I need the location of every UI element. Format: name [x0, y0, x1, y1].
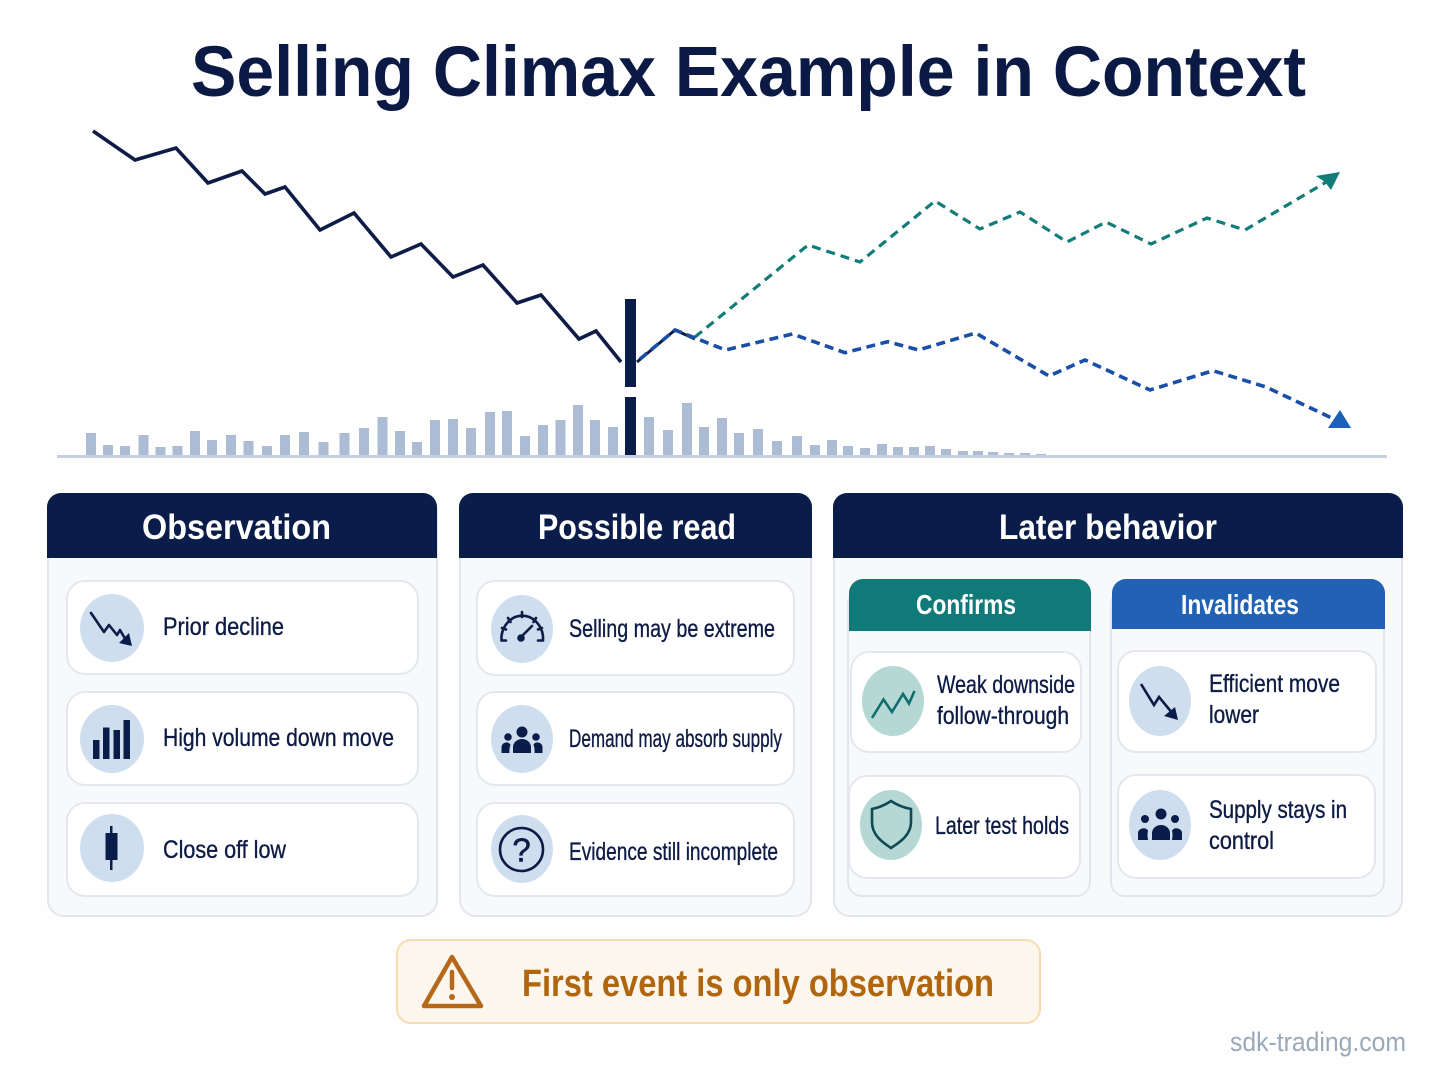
label: [1209, 796, 1347, 855]
panel body: [834, 495, 1402, 916]
heading: Observation: [142, 508, 331, 547]
panel: possible read: [459, 493, 812, 916]
card: high volume: [67, 692, 418, 785]
sub-heading: Invalidates: [1181, 589, 1299, 620]
label: follow-through: [937, 702, 1069, 730]
label: control: [1209, 827, 1274, 855]
volume baseline: [57, 455, 1387, 458]
panel: observation: [47, 493, 437, 916]
label: [1209, 670, 1340, 729]
icon: falling arrow: [1129, 666, 1191, 736]
card: prior decline: [67, 581, 418, 674]
label: Weak downside: [937, 671, 1075, 699]
heading: Later behavior: [999, 508, 1217, 547]
climax price bar: [625, 299, 636, 387]
chart: price and volume: [57, 131, 1387, 458]
confirming teal path: [695, 181, 1328, 337]
panel body: [48, 495, 437, 916]
sub-panel header: [1112, 579, 1385, 629]
label: Efficient move: [1209, 670, 1340, 698]
volume bars: [86, 403, 1046, 456]
label: Demand may absorb supply: [569, 725, 782, 753]
card: efficient move: [1118, 651, 1376, 752]
label: Later test holds: [935, 812, 1069, 840]
icon: gauge: [491, 595, 553, 663]
label: Selling may be extreme: [569, 615, 775, 643]
card: evidence incomplete: [477, 803, 794, 896]
panel: later behavior: [833, 493, 1403, 916]
card: weak downside: [851, 652, 1081, 752]
label: lower: [1209, 701, 1259, 729]
sub-panel body: [1111, 590, 1384, 896]
watermark: sdk-trading.com: [1230, 1027, 1406, 1057]
label: [937, 671, 1075, 730]
sub-panel header: [849, 579, 1091, 631]
card: demand absorbs: [477, 692, 794, 785]
card: supply control: [1118, 775, 1375, 878]
icon: volume bars: [80, 705, 144, 773]
label: Prior decline: [163, 613, 284, 641]
panel body: [460, 495, 811, 916]
rebound line: [637, 330, 695, 362]
icon: group: [491, 705, 553, 773]
icon: warning triangle: [424, 957, 481, 1006]
title: Selling Climax Example in Context: [191, 33, 1306, 112]
panel header: [47, 493, 437, 558]
sub-panel: invalidates: [1111, 579, 1385, 896]
icon: candlestick: [80, 814, 144, 882]
sub-heading: Confirms: [916, 589, 1016, 620]
heading: Possible read: [538, 508, 736, 547]
label: Close off low: [163, 836, 287, 864]
climax volume bar: [625, 397, 636, 455]
callout box: [397, 940, 1040, 1023]
arrowhead: blue: [1328, 410, 1351, 428]
label: Evidence still incomplete: [569, 838, 778, 866]
sub-panel body: [848, 590, 1090, 896]
callout: warning: [397, 940, 1040, 1023]
arrowhead: teal: [1316, 172, 1340, 190]
sub-panel: confirms: [848, 579, 1091, 896]
card: close off low: [67, 803, 418, 896]
decline price line: [93, 131, 621, 362]
icon: question mark: [491, 815, 553, 883]
invalidating blue path: [640, 330, 1336, 420]
icon: shield: [860, 790, 922, 860]
panel header: [833, 493, 1403, 558]
panel header: [459, 493, 812, 558]
icon: group: [1129, 790, 1191, 860]
card: selling extreme: [477, 581, 794, 675]
icon: rising zigzag: [862, 666, 924, 736]
callout text: First event is only observation: [522, 963, 994, 1005]
card: later test: [849, 776, 1080, 878]
label: Supply stays in: [1209, 796, 1347, 824]
label: High volume down move: [163, 724, 394, 752]
icon: question mark: ?: [512, 832, 531, 868]
icon: falling line: [80, 594, 144, 662]
